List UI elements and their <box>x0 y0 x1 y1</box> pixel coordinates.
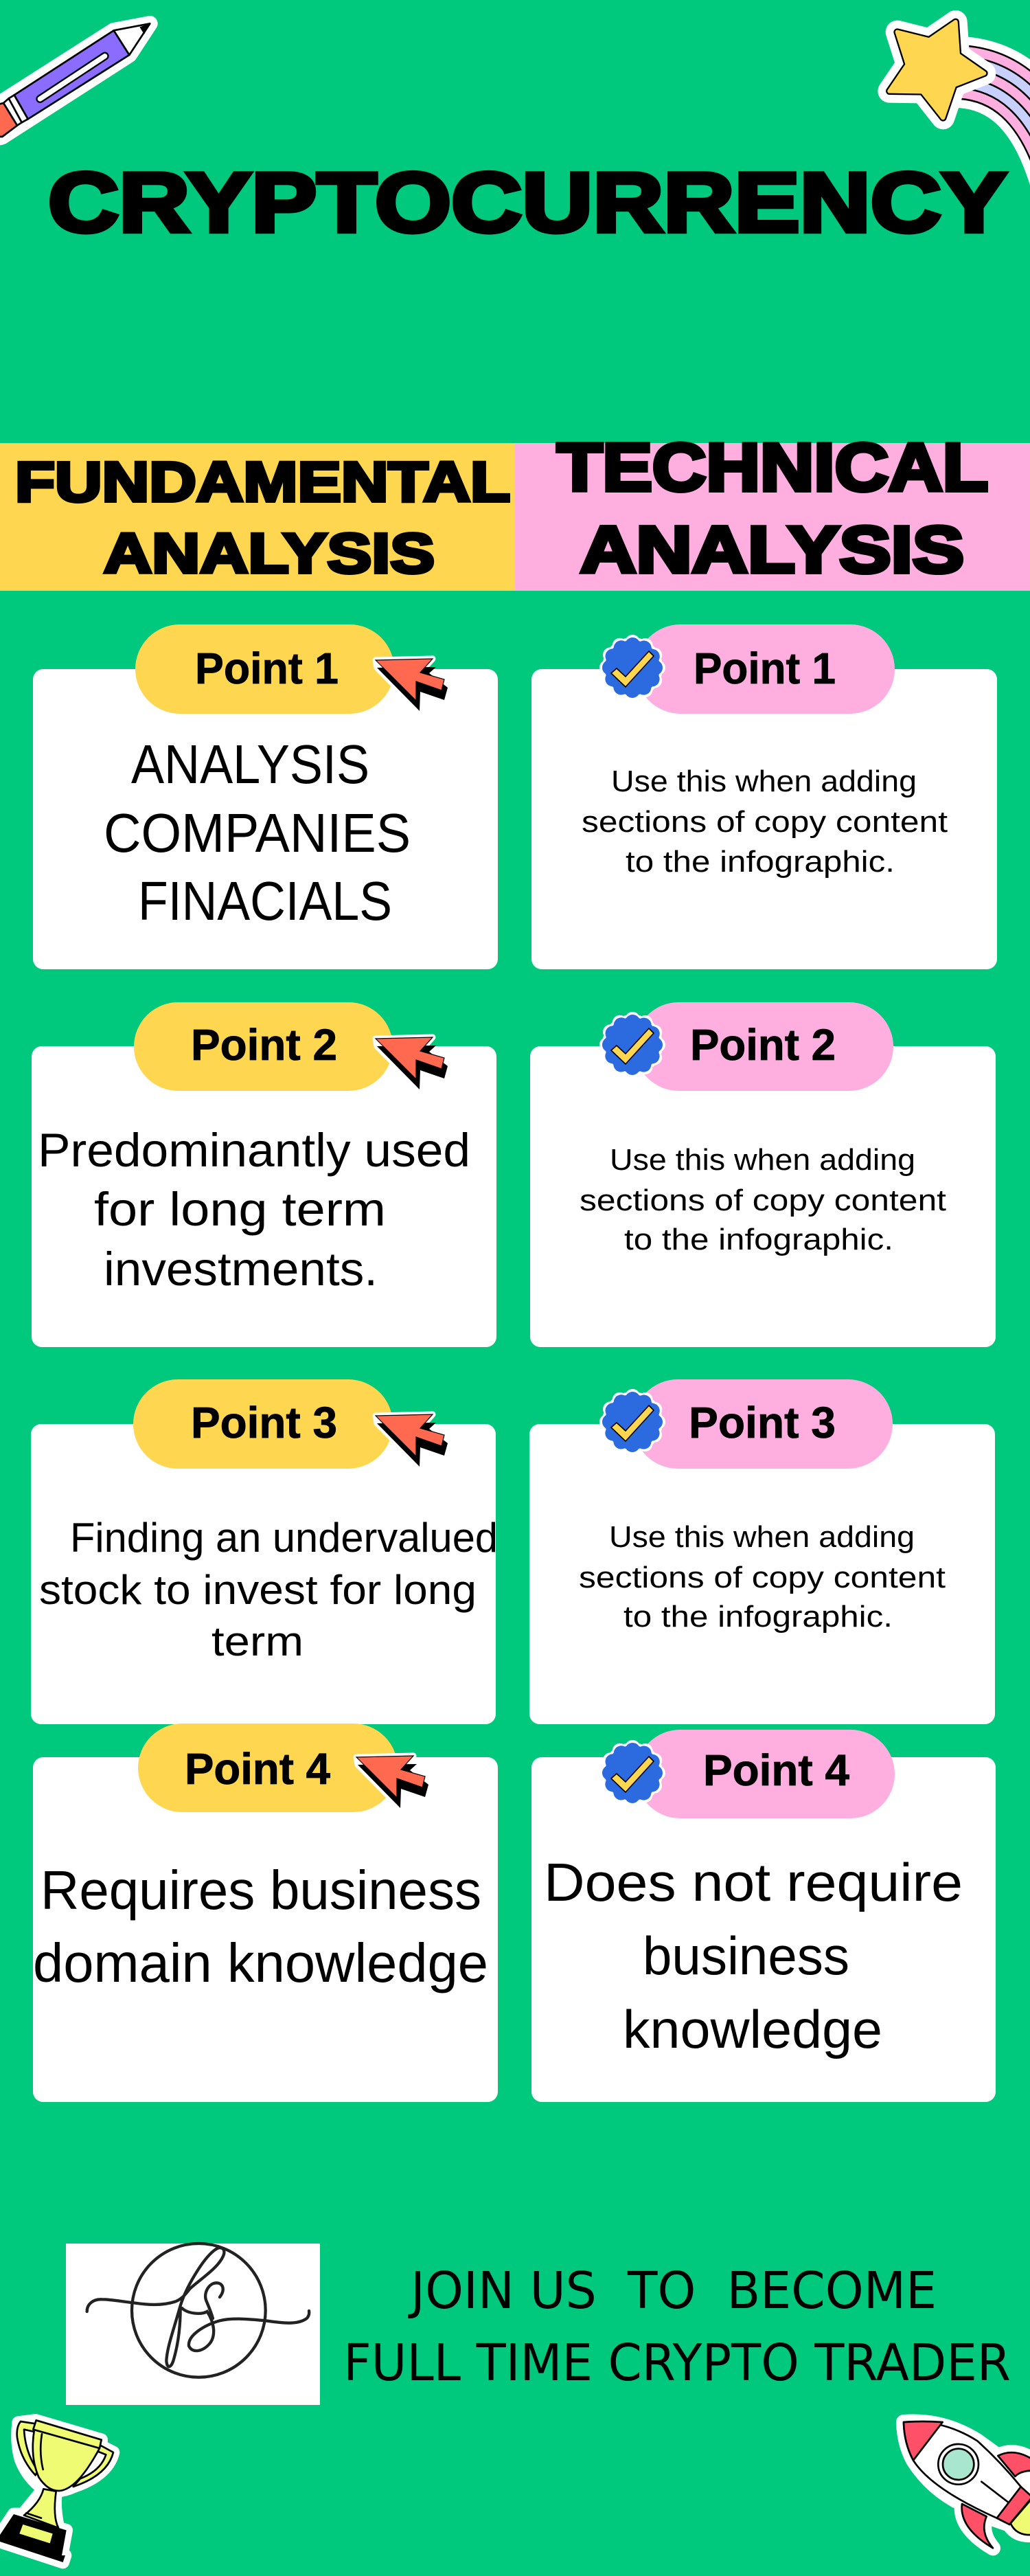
text block: to the infographic. <box>626 845 895 879</box>
heading: technical: TECHNICAL <box>557 429 988 505</box>
panel: technical point 3 <box>529 1379 995 1724</box>
icon: cursor arrow <box>356 1756 428 1808</box>
label: point 1: Point 1 <box>694 644 836 693</box>
text block: to the infographic. <box>623 1600 893 1634</box>
icon: shooting star sticker <box>889 22 1030 227</box>
icon: cursor arrow <box>376 1037 448 1089</box>
icon: verified badge <box>602 1743 663 1803</box>
text block <box>33 1860 488 1993</box>
text block <box>38 1124 470 1296</box>
icon: verified badge <box>602 637 663 698</box>
panel: fundamental point 4 <box>33 1724 498 2102</box>
label: point 3: Point 3 <box>689 1398 836 1447</box>
text block <box>39 1515 498 1664</box>
call to action: FULL TIME CRYPTO TRADER <box>343 2334 1011 2393</box>
icon: rocket sticker <box>904 2421 1030 2548</box>
call to action: JOIN US TO BECOME <box>408 2261 937 2320</box>
text block: COMPANIES <box>104 802 411 863</box>
text block: knowledge <box>623 1999 882 2059</box>
title: CRYPTOCURRENCY <box>48 156 1007 250</box>
label: point 2: Point 2 <box>690 1020 836 1070</box>
icon: pencil sticker <box>0 23 150 137</box>
icon: trophy sticker <box>0 2420 113 2562</box>
text block: Finding an undervalued <box>70 1515 498 1561</box>
text block: Use this when adding <box>611 765 917 798</box>
text block: term <box>211 1618 304 1664</box>
text block: sections of copy content <box>582 805 948 839</box>
call to action <box>343 2261 1011 2393</box>
text block: stock to invest for long <box>39 1567 477 1613</box>
text block: sections of copy content <box>579 1561 946 1594</box>
label: point 4: Point 4 <box>185 1744 330 1794</box>
text block: Does not require <box>544 1852 963 1912</box>
label: point 1: Point 1 <box>195 644 339 693</box>
label: point 4: Point 4 <box>703 1745 849 1795</box>
panel: technical point 2 <box>530 1002 996 1347</box>
text block: Requires business <box>41 1860 481 1921</box>
heading: analysis: ANALYSIS <box>104 522 435 585</box>
panel: fundamental analysis header <box>0 443 515 591</box>
text block: Use this when adding <box>609 1520 915 1554</box>
icon: cursor arrow <box>376 659 448 711</box>
heading: analysis: ANALYSIS <box>580 513 964 587</box>
panel: technical point 4 <box>531 1730 996 2102</box>
panel: fundamental point 1 <box>33 624 498 969</box>
text block: investments. <box>104 1243 378 1296</box>
text block <box>582 765 948 879</box>
label: point 2: Point 2 <box>191 1020 337 1070</box>
text block: to the infographic. <box>624 1223 893 1256</box>
text block: FINACIALS <box>138 870 392 931</box>
text block: ANALYSIS <box>131 734 369 795</box>
text block <box>579 1520 946 1634</box>
panel: fundamental point 3 <box>31 1379 498 1724</box>
text block: domain knowledge <box>33 1932 488 1993</box>
panel: fundamental point 2 <box>32 1002 496 1347</box>
icon: cursor arrow <box>376 1414 448 1467</box>
text block: sections of copy content <box>580 1184 946 1217</box>
icon: verified badge <box>602 1015 663 1075</box>
label: point 3: Point 3 <box>191 1398 337 1447</box>
panel: technical point 1 <box>531 624 997 969</box>
text block: Predominantly used <box>38 1124 470 1177</box>
text block <box>104 734 411 931</box>
text block: for long term <box>94 1183 386 1236</box>
text block: Use this when adding <box>610 1143 915 1177</box>
text block: business <box>643 1925 849 1986</box>
panel: technical analysis header <box>515 429 1030 591</box>
heading: fundamental: FUNDAMENTAL <box>15 451 510 514</box>
text block <box>580 1143 946 1256</box>
logo: fs monogram <box>66 2244 320 2405</box>
text block <box>544 1852 963 2059</box>
icon: verified badge <box>602 1392 663 1452</box>
